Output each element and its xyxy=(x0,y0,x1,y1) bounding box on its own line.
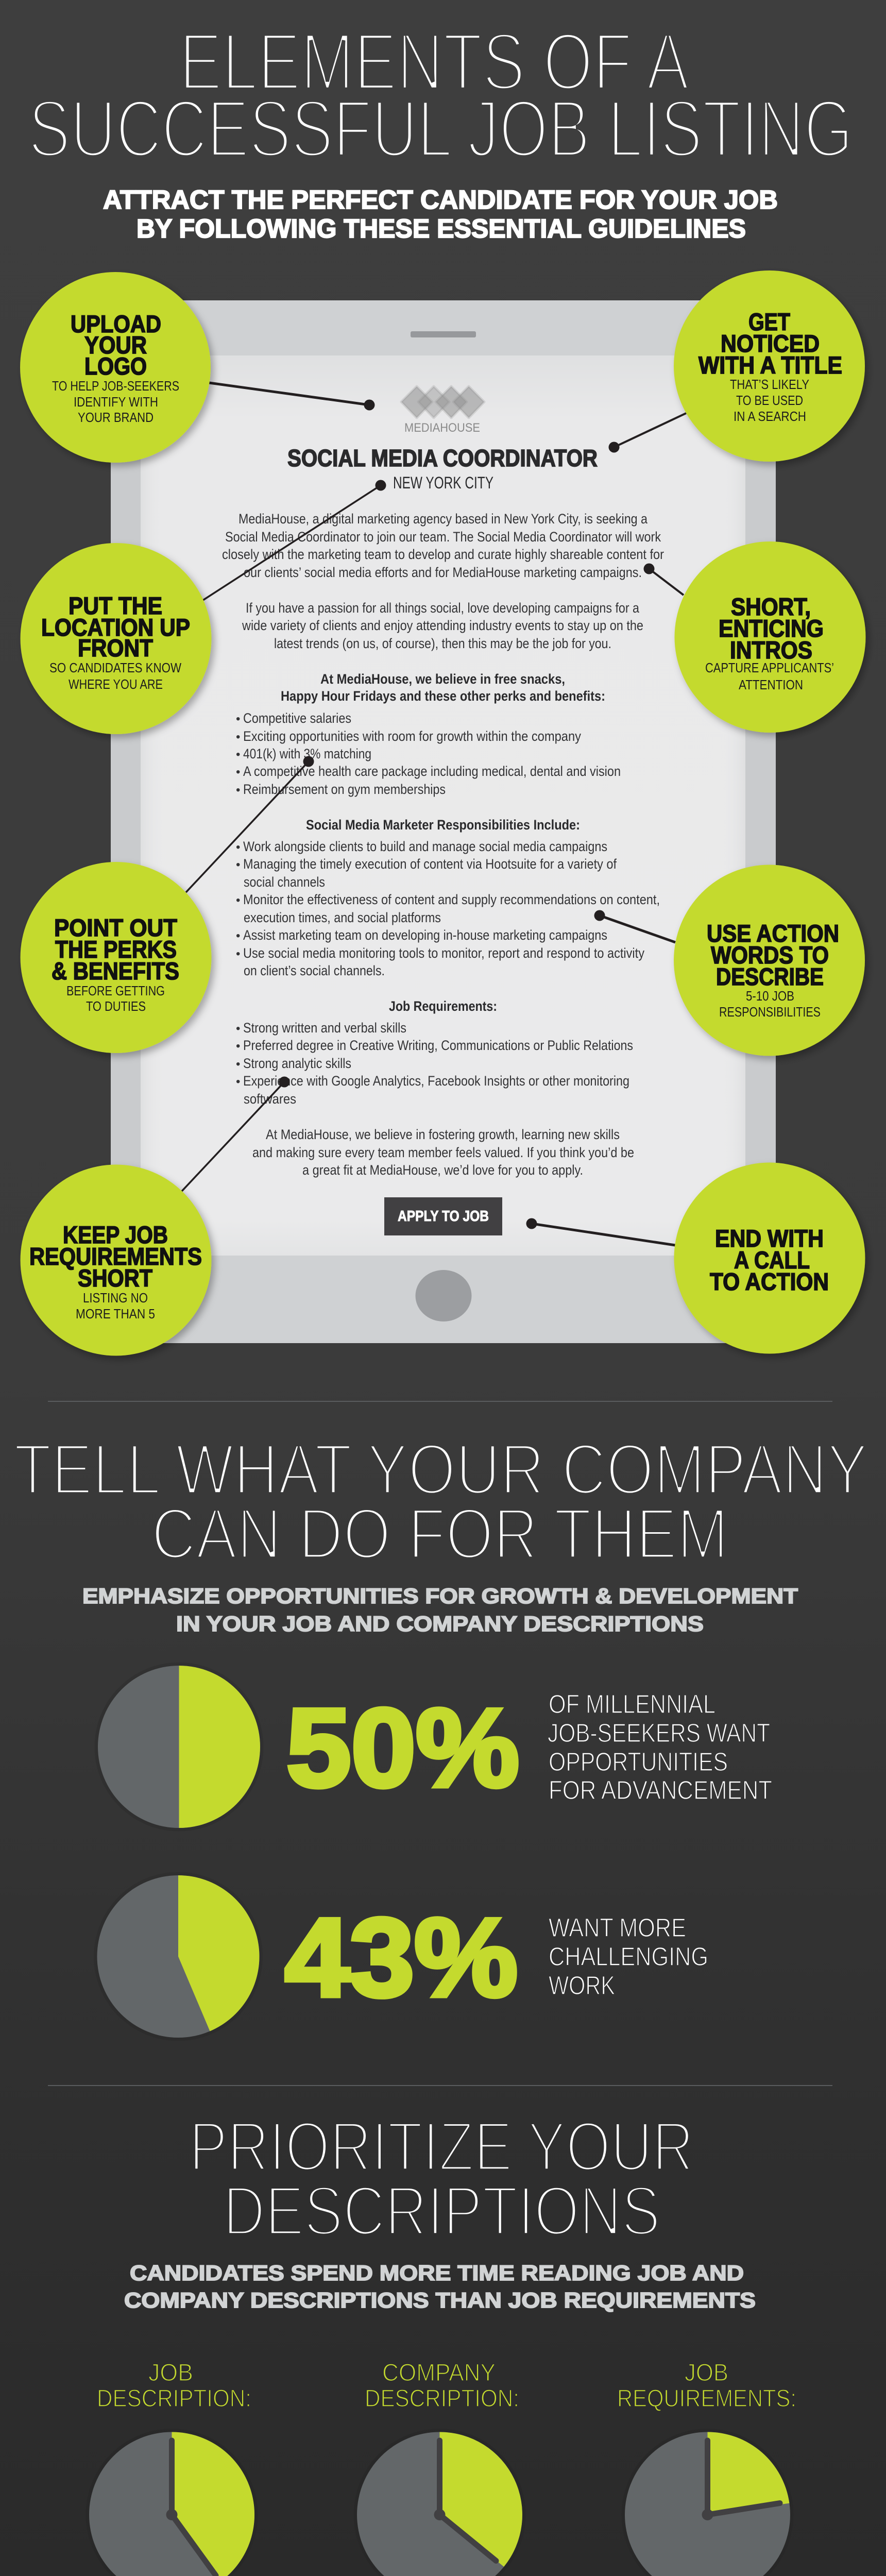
stat text: challenging work: CHALLENGING xyxy=(549,1942,708,1971)
job listing body text xyxy=(222,511,664,1178)
subtitle: ATTRACT THE PERFECT CANDIDATE FOR YOUR JOB xyxy=(103,185,778,214)
column: company description: COMPANY xyxy=(382,2359,496,2386)
closing paragraph: a great fit at MediaHouse, we’d love for you to apply. xyxy=(302,1162,583,1178)
perks heading: Happy Hour Fridays and these other perks and benefits: xyxy=(281,688,605,704)
responsibilities list: • xyxy=(236,840,240,854)
subtitle: BY FOLLOWING THESE ESSENTIAL GUIDELINES xyxy=(137,214,746,243)
perks list: • xyxy=(236,783,240,797)
perks heading: At MediaHouse, we believe in free snacks, xyxy=(320,671,565,687)
requirements list: Strong analytic skills xyxy=(243,1056,351,1071)
callout: upload your logo: LOGO xyxy=(84,352,147,380)
callout: keep job requirements short: LISTING NO xyxy=(83,1290,148,1306)
subtitle xyxy=(103,185,778,243)
stat: 43%: 43% xyxy=(285,1895,518,2020)
stat: 50%: 50% xyxy=(286,1685,519,1810)
stat text: millennial job-seekers: JOB-SEEKERS WANT xyxy=(548,1718,770,1748)
callout: upload your logo: IDENTIFY WITH xyxy=(74,394,158,410)
callout: point out the perks and benefits: & BENEFITS xyxy=(52,957,179,985)
callout: upload your logo: UPLOAD xyxy=(71,310,161,337)
callout: use action words: 5-10 JOB xyxy=(746,988,794,1004)
speaker xyxy=(411,331,476,337)
logo: MediaHouse xyxy=(401,386,484,435)
responsibilities list: Managing the timely execution of content via Hootsuite for a variety of xyxy=(243,856,617,872)
responsibilities list: Monitor the effectiveness of content and supply recommendations on content, xyxy=(243,892,660,907)
job listing body text: wide variety of clients and enjoy attending industry events to stay up on the xyxy=(242,618,643,633)
callout: use action words: DESCRIBE xyxy=(716,963,824,990)
callout: end with a call to action xyxy=(674,1162,865,1354)
perks list xyxy=(236,710,621,797)
callout: point out the perks and benefits: THE PERKS xyxy=(55,936,177,963)
job listing body text: Social Media Coordinator to join our team. The Social Media Coordinator will work xyxy=(225,529,661,545)
apply button: APPLY TO JOB xyxy=(398,1208,489,1225)
callout: use action words xyxy=(674,865,865,1056)
callout: put the location up front: LOCATION UP xyxy=(41,614,190,641)
callout: short, enticing intros: CAPTURE APPLICANTS’ xyxy=(705,660,834,675)
heading: prioritize your descriptions: DESCRIPTIONS xyxy=(223,2172,660,2250)
callout: get noticed with a title: IN A SEARCH xyxy=(734,409,806,424)
column: job requirements: REQUIREMENTS: xyxy=(617,2384,796,2412)
perks heading xyxy=(281,671,605,704)
job listing body text: our clients’ social media efforts and for MediaHouse marketing campaigns. xyxy=(244,565,642,580)
responsibilities list: on client’s social channels. xyxy=(244,963,385,978)
job listing body text: latest trends (on us, of course), then this may be the job for you. xyxy=(274,636,611,651)
perks list: • xyxy=(236,712,240,726)
requirements list: Experience with Google Analytics, Facebook Insights or other monitoring xyxy=(243,1073,629,1089)
requirements list: Strong written and verbal skills xyxy=(243,1020,406,1036)
job listing body text: If you have a passion for all things social, love developing campaigns for a xyxy=(246,600,640,616)
column: job description: DESCRIPTION: xyxy=(97,2384,251,2412)
subheading: emphasize opportunities: EMPHASIZE OPPORTUNITIES FOR GROWTH & DEVELOPMENT xyxy=(82,1584,798,1608)
requirements list xyxy=(236,1020,633,1107)
perks list: Competitive salaries xyxy=(243,710,351,726)
responsibilities list: Work alongside clients to build and manage social media campaigns xyxy=(243,839,607,854)
callout: use action words: RESPONSIBILITIES xyxy=(719,1004,821,1020)
callout: upload your logo: YOUR xyxy=(84,331,147,359)
responsibilities list: • xyxy=(236,929,240,943)
title xyxy=(28,16,853,174)
pie chart: 50% xyxy=(95,1662,264,1831)
responsibilities list: • xyxy=(236,858,240,872)
column: job requirements: JOB xyxy=(685,2359,728,2386)
responsibilities list: Assist marketing team on developing in-house marketing campaigns xyxy=(243,927,607,943)
job listing body text: MediaHouse, a digital marketing agency based in New York City, is seeking a xyxy=(238,511,648,527)
requirements list: • xyxy=(236,1022,240,1036)
callout: keep job requirements short xyxy=(21,1164,211,1356)
callout: get noticed with a title xyxy=(674,270,865,462)
stat text: challenging work: WORK xyxy=(549,1971,615,2000)
callout: point out the perks and benefits: POINT OUT xyxy=(54,914,177,941)
callout: get noticed with a title: NOTICED xyxy=(721,330,820,357)
responsibilities list xyxy=(236,839,660,978)
callout: end with a call to action: A CALL xyxy=(734,1246,810,1274)
callout: point out the perks and benefits: BEFORE GETTING xyxy=(66,983,165,998)
requirements list: softwares xyxy=(244,1091,296,1107)
heading: prioritize your descriptions: PRIORITIZE YOUR xyxy=(189,2107,694,2185)
closing paragraph: At MediaHouse, we believe in fostering growth, learning new skills xyxy=(266,1127,620,1142)
responsibilities list: • xyxy=(236,893,240,907)
responsibilities list: social channels xyxy=(244,874,325,890)
job location: NEW YORK CITY xyxy=(393,473,493,492)
perks list: • xyxy=(236,765,240,779)
column: company description xyxy=(353,2359,525,2576)
stat text: challenging work xyxy=(549,1913,708,2000)
callout: use action words: WORDS TO xyxy=(711,941,829,969)
job listing body text: closely with the marketing team to develop and curate highly shareable content for xyxy=(222,547,664,562)
callout: get noticed with a title: GET xyxy=(748,308,790,335)
callout: use action words: USE ACTION xyxy=(707,920,839,947)
callout: get noticed with a title: TO BE USED xyxy=(736,393,803,408)
callout: short, enticing intros: INTROS xyxy=(730,636,812,664)
responsibilities list: Use social media monitoring tools to monitor, report and respond to activity xyxy=(243,945,644,961)
home button xyxy=(415,1270,472,1321)
column: job description xyxy=(86,2359,258,2576)
heading: tell what your company can do: CAN DO FOR THEM xyxy=(151,1493,728,1574)
perks list: • xyxy=(236,730,240,744)
heading: prioritize your descriptions xyxy=(189,2107,694,2250)
callout: upload your logo xyxy=(20,272,211,463)
tablet mockup xyxy=(111,300,776,1343)
callout: short, enticing intros xyxy=(675,541,865,733)
title: ELEMENTS OF A xyxy=(179,16,689,107)
closing paragraph xyxy=(252,1127,634,1178)
callout: get noticed with a title: WITH A TITLE xyxy=(698,351,842,379)
stat text: millennial job-seekers: OPPORTUNITIES xyxy=(549,1747,728,1776)
callout: point out the perks and benefits xyxy=(21,862,211,1053)
perks list: A competitive health care package including medical, dental and vision xyxy=(243,764,621,779)
responsibilities list: execution times, and social platforms xyxy=(244,910,441,925)
callout: put the location up front: SO CANDIDATES KNOW xyxy=(49,660,181,675)
closing paragraph: and making sure every team member feels valued. If you think you’d be xyxy=(252,1145,634,1160)
callout: short, enticing intros: ENTICING xyxy=(719,615,824,642)
subheading: candidates spend more time: CANDIDATES SPEND MORE TIME READING JOB AND xyxy=(130,2261,744,2285)
perks list: Exciting opportunities with room for growth within the company xyxy=(243,728,581,744)
subheading: candidates spend more time: COMPANY DESCRIPTIONS THAN JOB REQUIREMENTS xyxy=(124,2288,756,2312)
callout: short, enticing intros: ATTENTION xyxy=(739,677,803,692)
callout: put the location up front: FRONT xyxy=(78,634,153,662)
callout: end with a call to action: TO ACTION xyxy=(710,1268,829,1295)
callout: put the location up front: WHERE YOU ARE xyxy=(69,676,163,692)
subheading: emphasize opportunities xyxy=(82,1584,798,1636)
apply button xyxy=(384,1197,502,1235)
callout: keep job requirements short: SHORT xyxy=(78,1264,152,1292)
pie chart: 43% xyxy=(94,1872,263,2041)
callout: keep job requirements short: REQUIREMENTS xyxy=(29,1243,202,1270)
perks list: 401(k) with 3% matching xyxy=(243,746,371,761)
requirements list: Preferred degree in Creative Writing, Communications or Public Relations xyxy=(243,1038,633,1053)
job title: SOCIAL MEDIA COORDINATOR xyxy=(287,445,598,471)
callout: point out the perks and benefits: TO DUTIES xyxy=(86,998,146,1014)
subheading: candidates spend more time xyxy=(124,2261,756,2312)
requirements heading: Job Requirements: xyxy=(389,998,497,1014)
requirements list: • xyxy=(236,1057,240,1071)
callout: put the location up front: PUT THE xyxy=(69,592,162,619)
callout: short, enticing intros: SHORT, xyxy=(731,593,811,620)
stat text: millennial job-seekers xyxy=(548,1689,772,1805)
requirements list: • xyxy=(236,1039,240,1053)
perks list: Reimbursement on gym memberships xyxy=(243,782,446,797)
responsibilities heading: Social Media Marketer Responsibilities Include: xyxy=(306,817,580,833)
responsibilities list: • xyxy=(236,947,240,961)
callout: end with a call to action: END WITH xyxy=(715,1225,824,1252)
callout: get noticed with a title: THAT’S LIKELY xyxy=(730,377,809,392)
column: company description: DESCRIPTION: xyxy=(365,2384,519,2412)
callout: upload your logo: TO HELP JOB-SEEKERS xyxy=(52,378,179,394)
stat text: millennial job-seekers: FOR ADVANCEMENT xyxy=(549,1775,772,1805)
stat text: millennial job-seekers: OF MILLENNIAL xyxy=(549,1689,715,1719)
stat text: challenging work: WANT MORE xyxy=(549,1913,686,1942)
heading: tell what your company can do xyxy=(14,1429,868,1574)
callout: put the location up front xyxy=(21,543,211,734)
subheading: emphasize opportunities: IN YOUR JOB AND COMPANY DESCRIPTIONS xyxy=(176,1612,704,1636)
callout: keep job requirements short: MORE THAN 5 xyxy=(76,1306,155,1321)
callout: keep job requirements short: KEEP JOB xyxy=(63,1221,168,1248)
column: job description: JOB xyxy=(148,2359,193,2386)
callout: upload your logo: YOUR BRAND xyxy=(78,410,154,425)
requirements list: • xyxy=(236,1075,240,1089)
logo: MediaHouse: MEDIAHOUSE xyxy=(404,421,480,435)
column: job requirements xyxy=(617,2359,796,2576)
connector lines and dots xyxy=(182,383,686,1245)
perks list: • xyxy=(236,748,240,761)
